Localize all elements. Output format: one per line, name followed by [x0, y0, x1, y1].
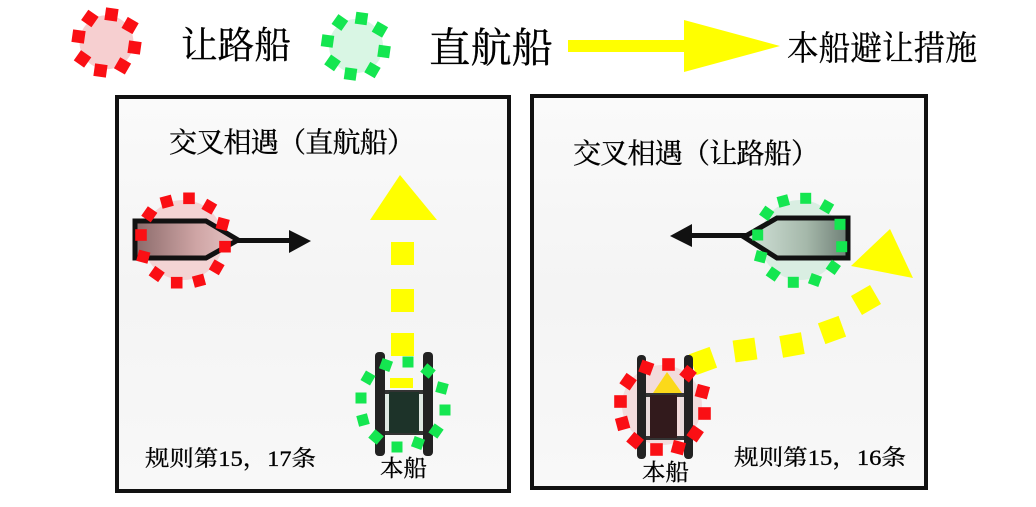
yellow course arrow, turning to starboard: [689, 229, 913, 375]
legend label: give-way vessel: 让路船: [181, 26, 291, 67]
rule reference: 规则第15，16条: [734, 445, 906, 471]
yellow course arrow, straight ahead: [370, 175, 437, 356]
own ship, give-way: [615, 355, 710, 459]
panel: crossing, give-way vessel: [532, 96, 926, 488]
panel: crossing, stand-on vessel: [117, 97, 509, 491]
legend label: stand-on vessel: 直航船: [429, 25, 553, 71]
legend label: own ship avoiding action: 本船避让措施: [787, 30, 977, 68]
rule reference: 规则第15，17条: [145, 446, 316, 472]
own ship label: 本船: [380, 456, 427, 481]
legend: yellow action arrow: [568, 20, 780, 72]
stand-on ship heading left: [670, 193, 848, 287]
give-way ship heading right: [135, 193, 311, 288]
panel title: 交叉相遇（直航船）: [169, 127, 415, 159]
panel title: 交叉相遇（让路船）: [573, 138, 819, 170]
legend: stand-on vessel marker: [321, 12, 390, 80]
own ship label: 本船: [642, 460, 689, 485]
legend: give-way vessel marker: [72, 8, 141, 77]
own ship, stand-on: [356, 352, 450, 456]
